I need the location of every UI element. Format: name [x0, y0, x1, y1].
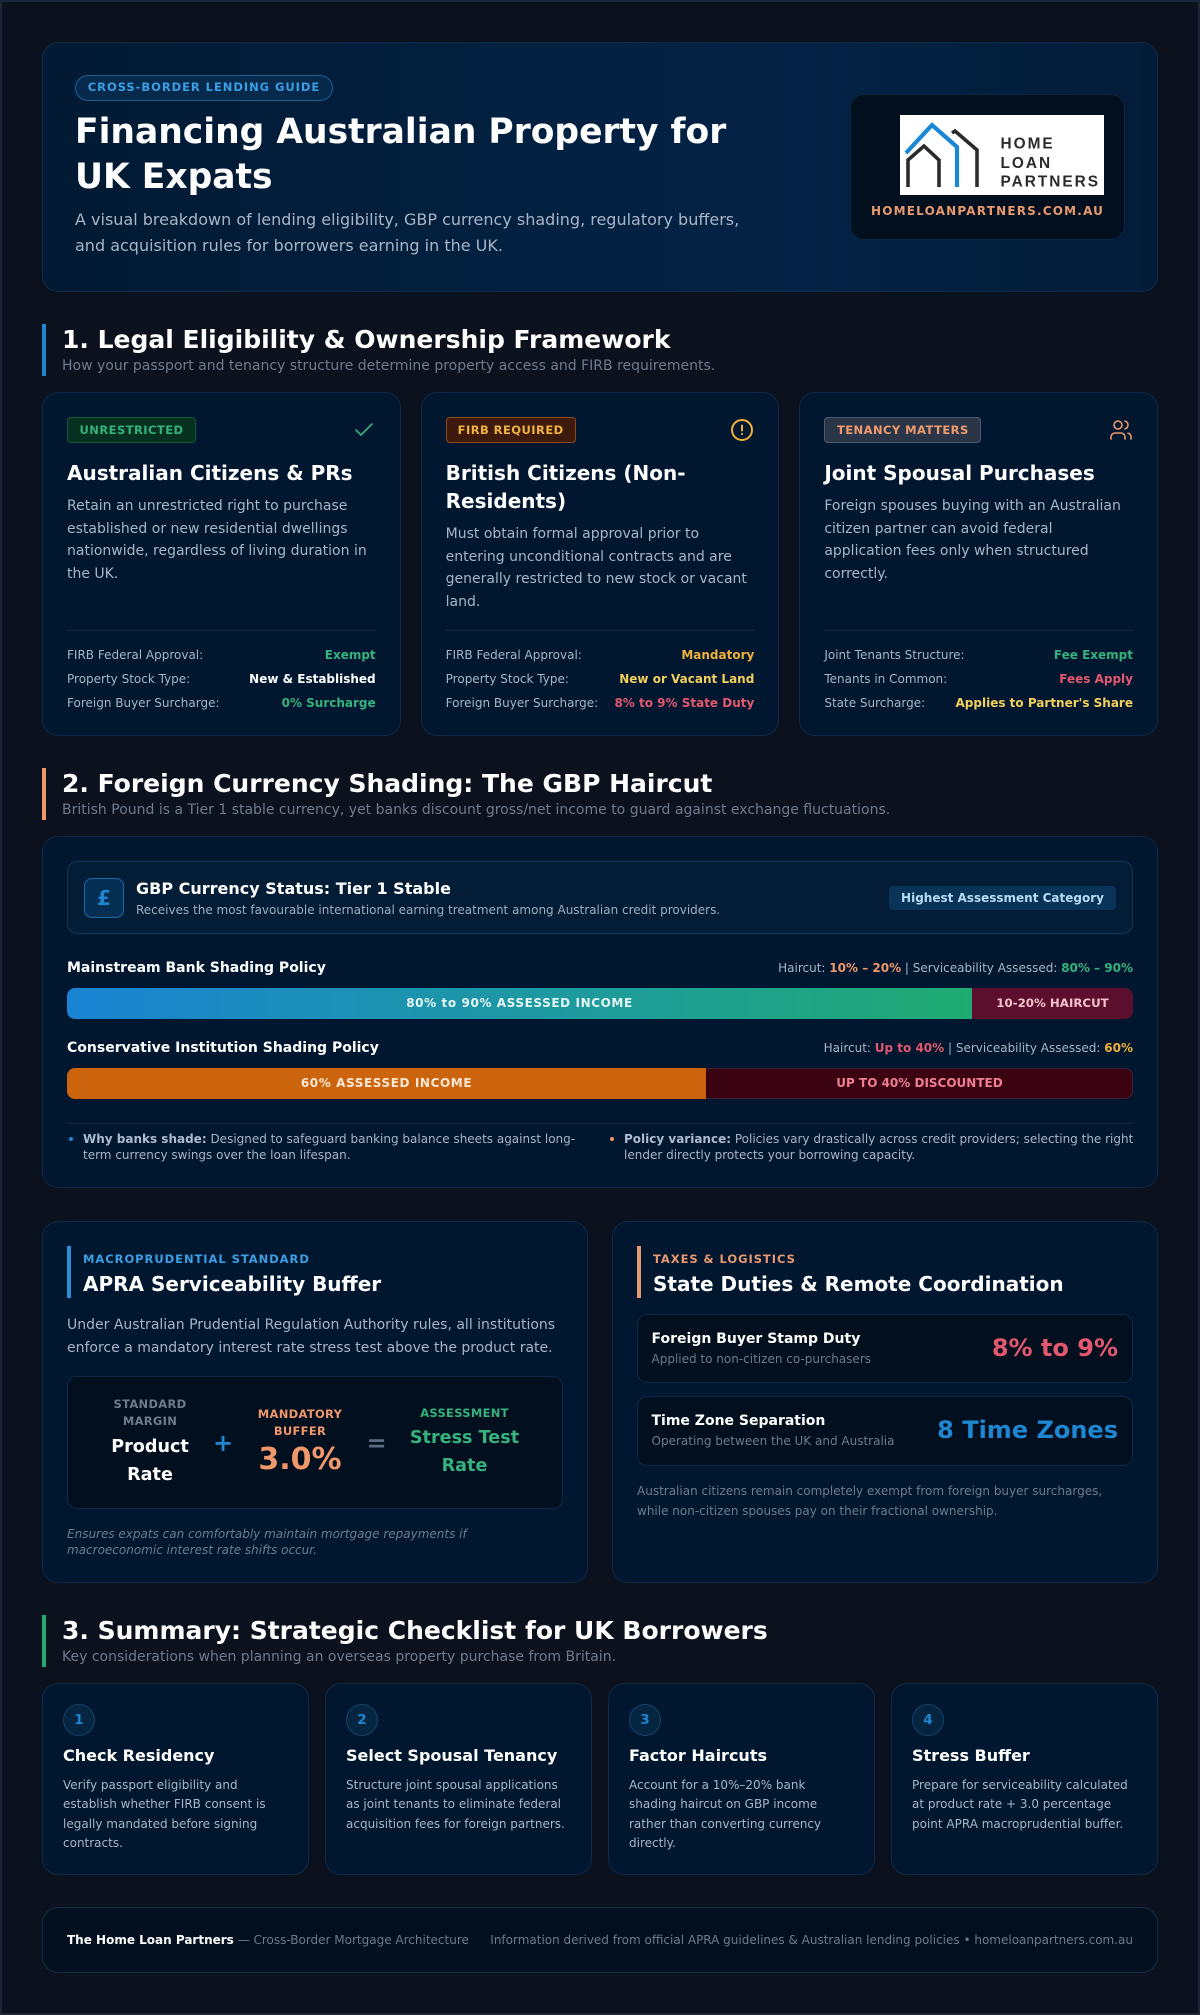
step number — [346, 1704, 378, 1736]
facts table: 8% to 9% State Duty — [614, 696, 754, 710]
eyebrow: TAXES & LOGISTICS — [653, 1252, 796, 1266]
term: mandatory buffer — [258, 1406, 342, 1477]
term: product rate: STANDARD — [113, 1396, 187, 1410]
card body: application fees only when structured — [824, 543, 1089, 559]
step number: 3 — [640, 1712, 650, 1728]
note: policy variance — [610, 1132, 1134, 1162]
footer — [42, 1907, 1158, 1973]
term: stress test rate — [410, 1406, 519, 1476]
section heading 1 — [42, 324, 715, 376]
step number — [63, 1704, 95, 1736]
mainstream bar — [67, 988, 1133, 1019]
logo image: HOME — [1000, 136, 1055, 152]
step title: Check Residency — [63, 1746, 214, 1765]
facts table: Property Stock Type: — [67, 672, 190, 686]
step body — [346, 1778, 565, 1831]
badge: FIRB REQUIRED — [458, 423, 564, 437]
assessed segment: 80% to 90% ASSESSED INCOME — [406, 996, 633, 1010]
discounted segment: UP TO 40% DISCOUNTED — [836, 1076, 1003, 1090]
step number: 1 — [74, 1712, 84, 1728]
note: policy variance: lender directly protects your borrowing capacity. — [624, 1148, 915, 1162]
subtitle: A visual breakdown of lending eligibility, GBP currency shading, regulatory buffers, — [75, 210, 739, 229]
panel title: State Duties & Remote Coordination — [653, 1272, 1064, 1296]
haircut segment: 10-20% HAIRCUT — [996, 996, 1109, 1010]
conservative label — [67, 1040, 1133, 1056]
step body: as joint tenants to eliminate federal — [346, 1797, 561, 1811]
step body: contracts. — [63, 1836, 123, 1850]
step body: Verify passport eligibility and — [63, 1778, 238, 1792]
assessed segment — [67, 988, 972, 1019]
title — [75, 112, 726, 197]
card body: Retain an unrestricted right to purchase — [67, 498, 347, 514]
card title: Joint Spousal Purchases — [824, 461, 1095, 485]
panel: state duties — [612, 1221, 1158, 1583]
card title: Australian Citizens & PRs — [67, 461, 353, 485]
card body — [824, 498, 1121, 582]
facts table: Fees Apply — [1059, 672, 1133, 686]
facts table: Foreign Buyer Surcharge: — [67, 696, 220, 710]
card body: land. — [446, 594, 480, 610]
stat row: stamp duty — [637, 1314, 1133, 1383]
term: product rate: MARGIN — [123, 1414, 177, 1428]
facts table: New & Established — [249, 672, 376, 686]
panel: APRA buffer — [42, 1221, 588, 1583]
operator equals: = — [366, 1429, 387, 1457]
term: mandatory buffer: MANDATORY — [258, 1406, 342, 1420]
step number: 4 — [923, 1712, 933, 1728]
formula box — [67, 1376, 563, 1509]
subtitle: and acquisition rules for borrowers earning in the UK. — [75, 236, 503, 255]
accent bar — [42, 768, 46, 820]
footnote: Australian citizens remain completely exempt from foreign buyer surcharges, — [637, 1484, 1102, 1498]
eyebrow badge — [75, 75, 333, 101]
card body: the UK. — [67, 566, 118, 582]
card title: British Citizens (Non- — [446, 461, 686, 485]
icon: pound — [84, 878, 124, 918]
facts table: Tenants in Common: — [824, 672, 947, 686]
status title: GBP Currency Status: Tier 1 Stable — [136, 879, 451, 898]
stat row: stamp duty: Applied to non-citizen co-purchasers — [652, 1352, 871, 1366]
eyebrow: MACROPRUDENTIAL STANDARD — [83, 1252, 310, 1266]
card: Australian citizens — [42, 392, 401, 736]
term: product rate: Rate — [127, 1465, 173, 1485]
step body: Structure joint spousal applications — [346, 1778, 558, 1792]
logo image: LOAN — [1000, 155, 1052, 172]
note: why banks shade: term currency swings over the loan lifespan. — [83, 1148, 351, 1162]
card title — [446, 461, 686, 513]
card body: nationwide, regardless of living duration in — [67, 543, 367, 559]
conservative label: Haircut: Up to 40% | Serviceability Assessed: 60% — [824, 1041, 1133, 1055]
facts table — [446, 648, 754, 710]
logo url: HOMELOANPARTNERS.COM.AU — [871, 204, 1104, 218]
stat row: time zones: Time Zone Separation — [652, 1413, 825, 1429]
step body: legally mandated before signing — [63, 1817, 257, 1831]
card title: Residents) — [446, 489, 566, 513]
icon: check — [355, 423, 373, 436]
panel title: APRA Serviceability Buffer — [83, 1272, 381, 1296]
stat row: time zones: Operating between the UK and Australia — [652, 1434, 894, 1448]
badge — [824, 417, 981, 443]
status box — [67, 861, 1133, 934]
panel: GBP shading — [42, 836, 1158, 1188]
accent bar — [42, 324, 46, 376]
checklist card 4 — [891, 1683, 1158, 1875]
footnote — [67, 1527, 468, 1557]
step body: at product rate + 3.0 percentage — [912, 1797, 1111, 1811]
note: why banks shade — [69, 1132, 575, 1162]
footnote — [637, 1484, 1102, 1518]
title: UK Expats — [75, 157, 273, 197]
accent bar — [637, 1246, 641, 1298]
subtitle — [75, 210, 739, 255]
card body: Foreign spouses buying with an Australian — [824, 498, 1121, 514]
section subtitle: British Pound is a Tier 1 stable currency, yet banks discount gross/net income to guard against exchange fluctuations. — [62, 802, 890, 818]
mainstream label: Haircut: 10% – 20% | Serviceability Assessed: 80% – 90% — [778, 961, 1133, 975]
stat row: time zones: 8 Time Zones — [937, 1416, 1118, 1444]
facts table: Exempt — [325, 648, 376, 662]
mainstream label: Mainstream Bank Shading Policy — [67, 960, 326, 976]
badge — [446, 417, 576, 443]
facts table: Foreign Buyer Surcharge: — [446, 696, 598, 710]
section heading 3 — [42, 1615, 768, 1667]
card body — [446, 526, 747, 610]
status pill: Highest Assessment Category — [901, 891, 1104, 905]
step body: Account for a 10%–20% bank — [629, 1778, 805, 1792]
step body: point APRA macroprudential buffer. — [912, 1817, 1123, 1831]
heading text: 1. Legal Eligibility & Ownership Framework — [62, 325, 670, 354]
footnote: while non-citizen spouses pay on their fractional ownership. — [637, 1504, 997, 1518]
step title: Factor Haircuts — [629, 1746, 767, 1765]
note: why banks shade: Why banks shade: Designed to safeguard banking balance sheets against long- — [83, 1132, 575, 1146]
facts table: New or Vacant Land — [619, 672, 754, 686]
panel body — [67, 1316, 555, 1356]
step body: acquisition fees for foreign partners. — [346, 1817, 565, 1831]
icon: pound: £ — [97, 886, 111, 910]
status pill — [889, 886, 1116, 910]
card: joint spousal — [799, 392, 1158, 736]
badge: UNRESTRICTED — [79, 423, 184, 437]
accent bar — [67, 1246, 71, 1298]
value: 3.0% — [258, 1442, 342, 1477]
badge — [67, 417, 196, 443]
facts table: State Surcharge: — [824, 696, 925, 710]
card body: correctly. — [824, 566, 888, 582]
step body: shading haircut on GBP income — [629, 1797, 817, 1811]
heading text: 3. Summary: Strategic Checklist for UK Borrowers — [62, 1616, 768, 1645]
conservative label: Conservative Institution Shading Policy — [67, 1040, 379, 1056]
icon: alert circle — [731, 419, 753, 441]
facts table — [67, 648, 376, 710]
note: policy variance: Policy variance: Policies vary drastically across credit providers; selecting the right — [624, 1132, 1133, 1146]
step body: Prepare for serviceability calculated — [912, 1778, 1128, 1792]
footer left text: The Home Loan Partners — Cross-Border Mortgage Architecture — [67, 1932, 469, 1946]
footer right text: Information derived from official APRA guidelines & Australian lending policies • homeloanpartners.com.au — [490, 1932, 1133, 1946]
step body: directly. — [629, 1836, 676, 1850]
step number: 2 — [357, 1712, 367, 1728]
card body: established or new residential dwellings — [67, 520, 348, 536]
facts table: 0% Surcharge — [282, 696, 376, 710]
header panel — [42, 42, 1158, 292]
card body: entering unconditional contracts and are — [446, 548, 732, 564]
step body — [629, 1778, 821, 1850]
stat row: stamp duty: 8% to 9% — [992, 1334, 1118, 1362]
mainstream label — [67, 960, 1133, 976]
stat row: stamp duty: Foreign Buyer Stamp Duty — [652, 1331, 860, 1347]
term: product rate — [111, 1396, 189, 1485]
operator plus: + — [213, 1429, 233, 1457]
card body: generally restricted to new stock or vacant — [446, 571, 747, 587]
step body — [63, 1778, 266, 1850]
step title: Stress Buffer — [912, 1746, 1030, 1765]
section heading 2 — [42, 768, 890, 820]
facts table: Joint Tenants Structure: — [824, 648, 965, 662]
assessed segment: 60% ASSESSED INCOME — [301, 1076, 472, 1090]
section subtitle: Key considerations when planning an overseas property purchase from Britain. — [62, 1649, 616, 1665]
step body: rather than converting currency — [629, 1817, 821, 1831]
badge: TENANCY MATTERS — [837, 423, 969, 437]
facts table: FIRB Federal Approval: — [67, 648, 203, 662]
term: stress test rate: Stress Test — [410, 1428, 519, 1448]
facts table: Mandatory — [681, 648, 754, 662]
logo image — [900, 115, 1104, 195]
facts table — [824, 648, 1133, 710]
footnote: Ensures expats can comfortably maintain mortgage repayments if — [67, 1527, 467, 1541]
section subtitle: How your passport and tenancy structure determine property access and FIRB requirements. — [62, 358, 715, 374]
card: British citizens — [421, 392, 779, 736]
facts table: Property Stock Type: — [446, 672, 569, 686]
facts table: Applies to Partner's Share — [956, 696, 1133, 710]
term: product rate: Product — [111, 1437, 189, 1457]
step number — [629, 1704, 661, 1736]
status description: Receives the most favourable international earning treatment among Australian credit providers. — [136, 903, 720, 917]
step body — [912, 1778, 1128, 1831]
logo card — [850, 94, 1125, 240]
title: Financing Australian Property for — [75, 112, 726, 152]
facts table: Fee Exempt — [1054, 648, 1133, 662]
accent bar — [42, 1615, 46, 1667]
term: stress test rate: ASSESSMENT — [420, 1406, 509, 1420]
term: mandatory buffer: BUFFER — [274, 1424, 326, 1438]
checklist card 3 — [608, 1683, 875, 1875]
step title: Select Spousal Tenancy — [346, 1746, 557, 1765]
checklist card 1 — [42, 1683, 309, 1875]
eyebrow badge: CROSS-BORDER LENDING GUIDE — [88, 80, 320, 94]
heading text: 2. Foreign Currency Shading: The GBP Haircut — [62, 769, 712, 798]
assessed segment — [67, 1068, 706, 1099]
card body — [67, 498, 367, 582]
icon: users — [1110, 420, 1132, 440]
step body: establish whether FIRB consent is — [63, 1797, 266, 1811]
card body: citizen partner can avoid federal — [824, 520, 1053, 536]
card body: Must obtain formal approval prior to — [446, 526, 699, 542]
logo image: PARTNERS — [1000, 174, 1100, 190]
checklist card 2 — [325, 1683, 592, 1875]
conservative bar — [67, 1068, 1133, 1099]
facts table: FIRB Federal Approval: — [446, 648, 582, 662]
term: stress test rate: Rate — [442, 1456, 487, 1476]
panel body: enforce a mandatory interest rate stress test above the product rate. — [67, 1340, 553, 1356]
stat row: time zones — [637, 1396, 1133, 1466]
footnote: macroeconomic interest rate shifts occur. — [67, 1543, 317, 1557]
step number — [912, 1704, 944, 1736]
panel body: Under Australian Prudential Regulation Authority rules, all institutions — [67, 1316, 555, 1332]
